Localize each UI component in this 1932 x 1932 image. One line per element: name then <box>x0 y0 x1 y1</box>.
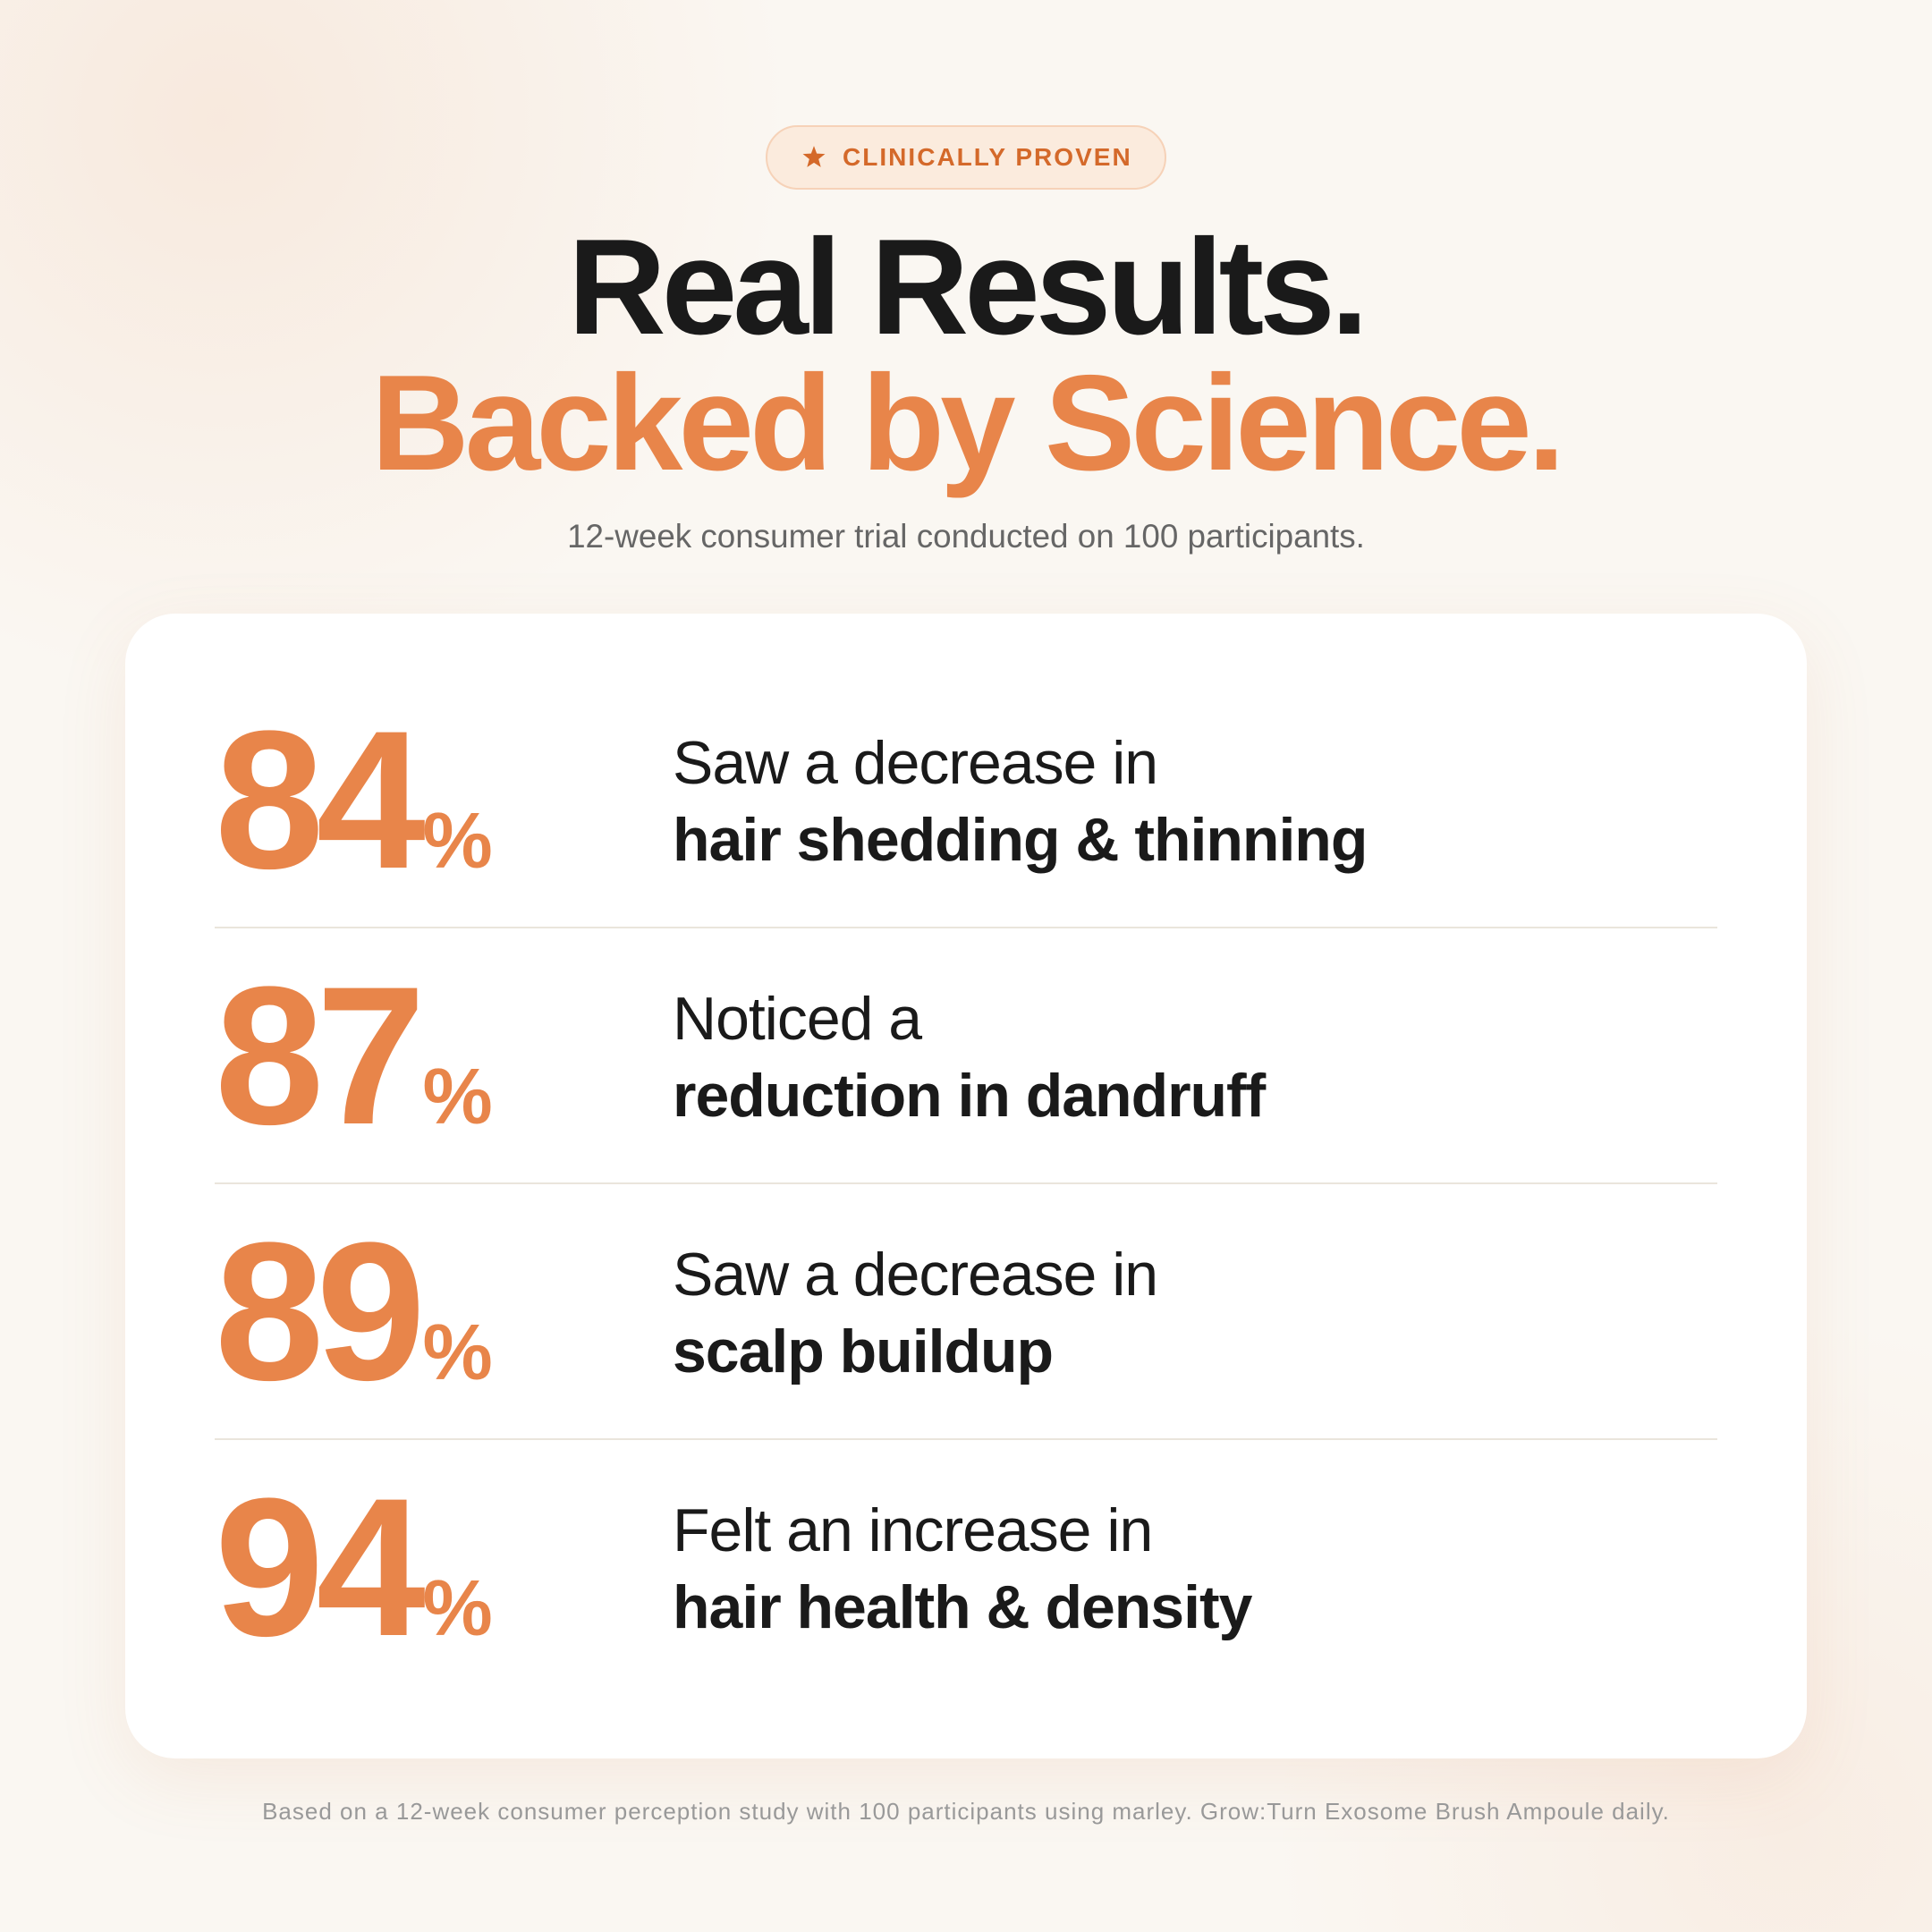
percent sign: % <box>422 1308 491 1396</box>
subtitle: 12-week consumer trial conducted on 100 participants. <box>567 518 1365 555</box>
description line 2: scalp buildup <box>673 1318 1053 1385</box>
description line 1: Saw a decrease in <box>673 1241 1157 1309</box>
title line 2: Backed by Science. <box>371 347 1561 499</box>
description line 1: Felt an increase in <box>673 1496 1152 1564</box>
background glow: bottom right <box>1216 1216 1932 1932</box>
description line 2: hair health & density <box>673 1573 1251 1641</box>
footnote: Based on a 12-week consumer perception study with 100 participants using marley. Grow:Turn Exosome Brush Ampoule daily. <box>262 1798 1670 1825</box>
icon: star <box>803 146 825 167</box>
stat number 89: 89 <box>215 1201 418 1421</box>
description line 2: reduction in dandruff <box>673 1062 1265 1130</box>
description line 1: Noticed a <box>673 985 921 1053</box>
panel: results card <box>125 614 1807 1758</box>
description line 1: Saw a decrease in <box>673 729 1157 797</box>
percent sign: % <box>422 796 491 885</box>
stat number 94: 94 <box>215 1457 418 1677</box>
badge: clinically proven <box>766 125 1166 190</box>
description line 2: hair shedding & thinning <box>673 806 1367 874</box>
title line 1: Real Results. <box>568 211 1364 363</box>
percent sign: % <box>422 1052 491 1140</box>
stat number 84: 84 <box>215 690 418 910</box>
badge label: CLINICALLY PROVEN <box>843 143 1132 171</box>
stat number 87: 87 <box>215 945 418 1165</box>
percent sign: % <box>422 1563 491 1652</box>
background glow: top left <box>0 0 805 716</box>
